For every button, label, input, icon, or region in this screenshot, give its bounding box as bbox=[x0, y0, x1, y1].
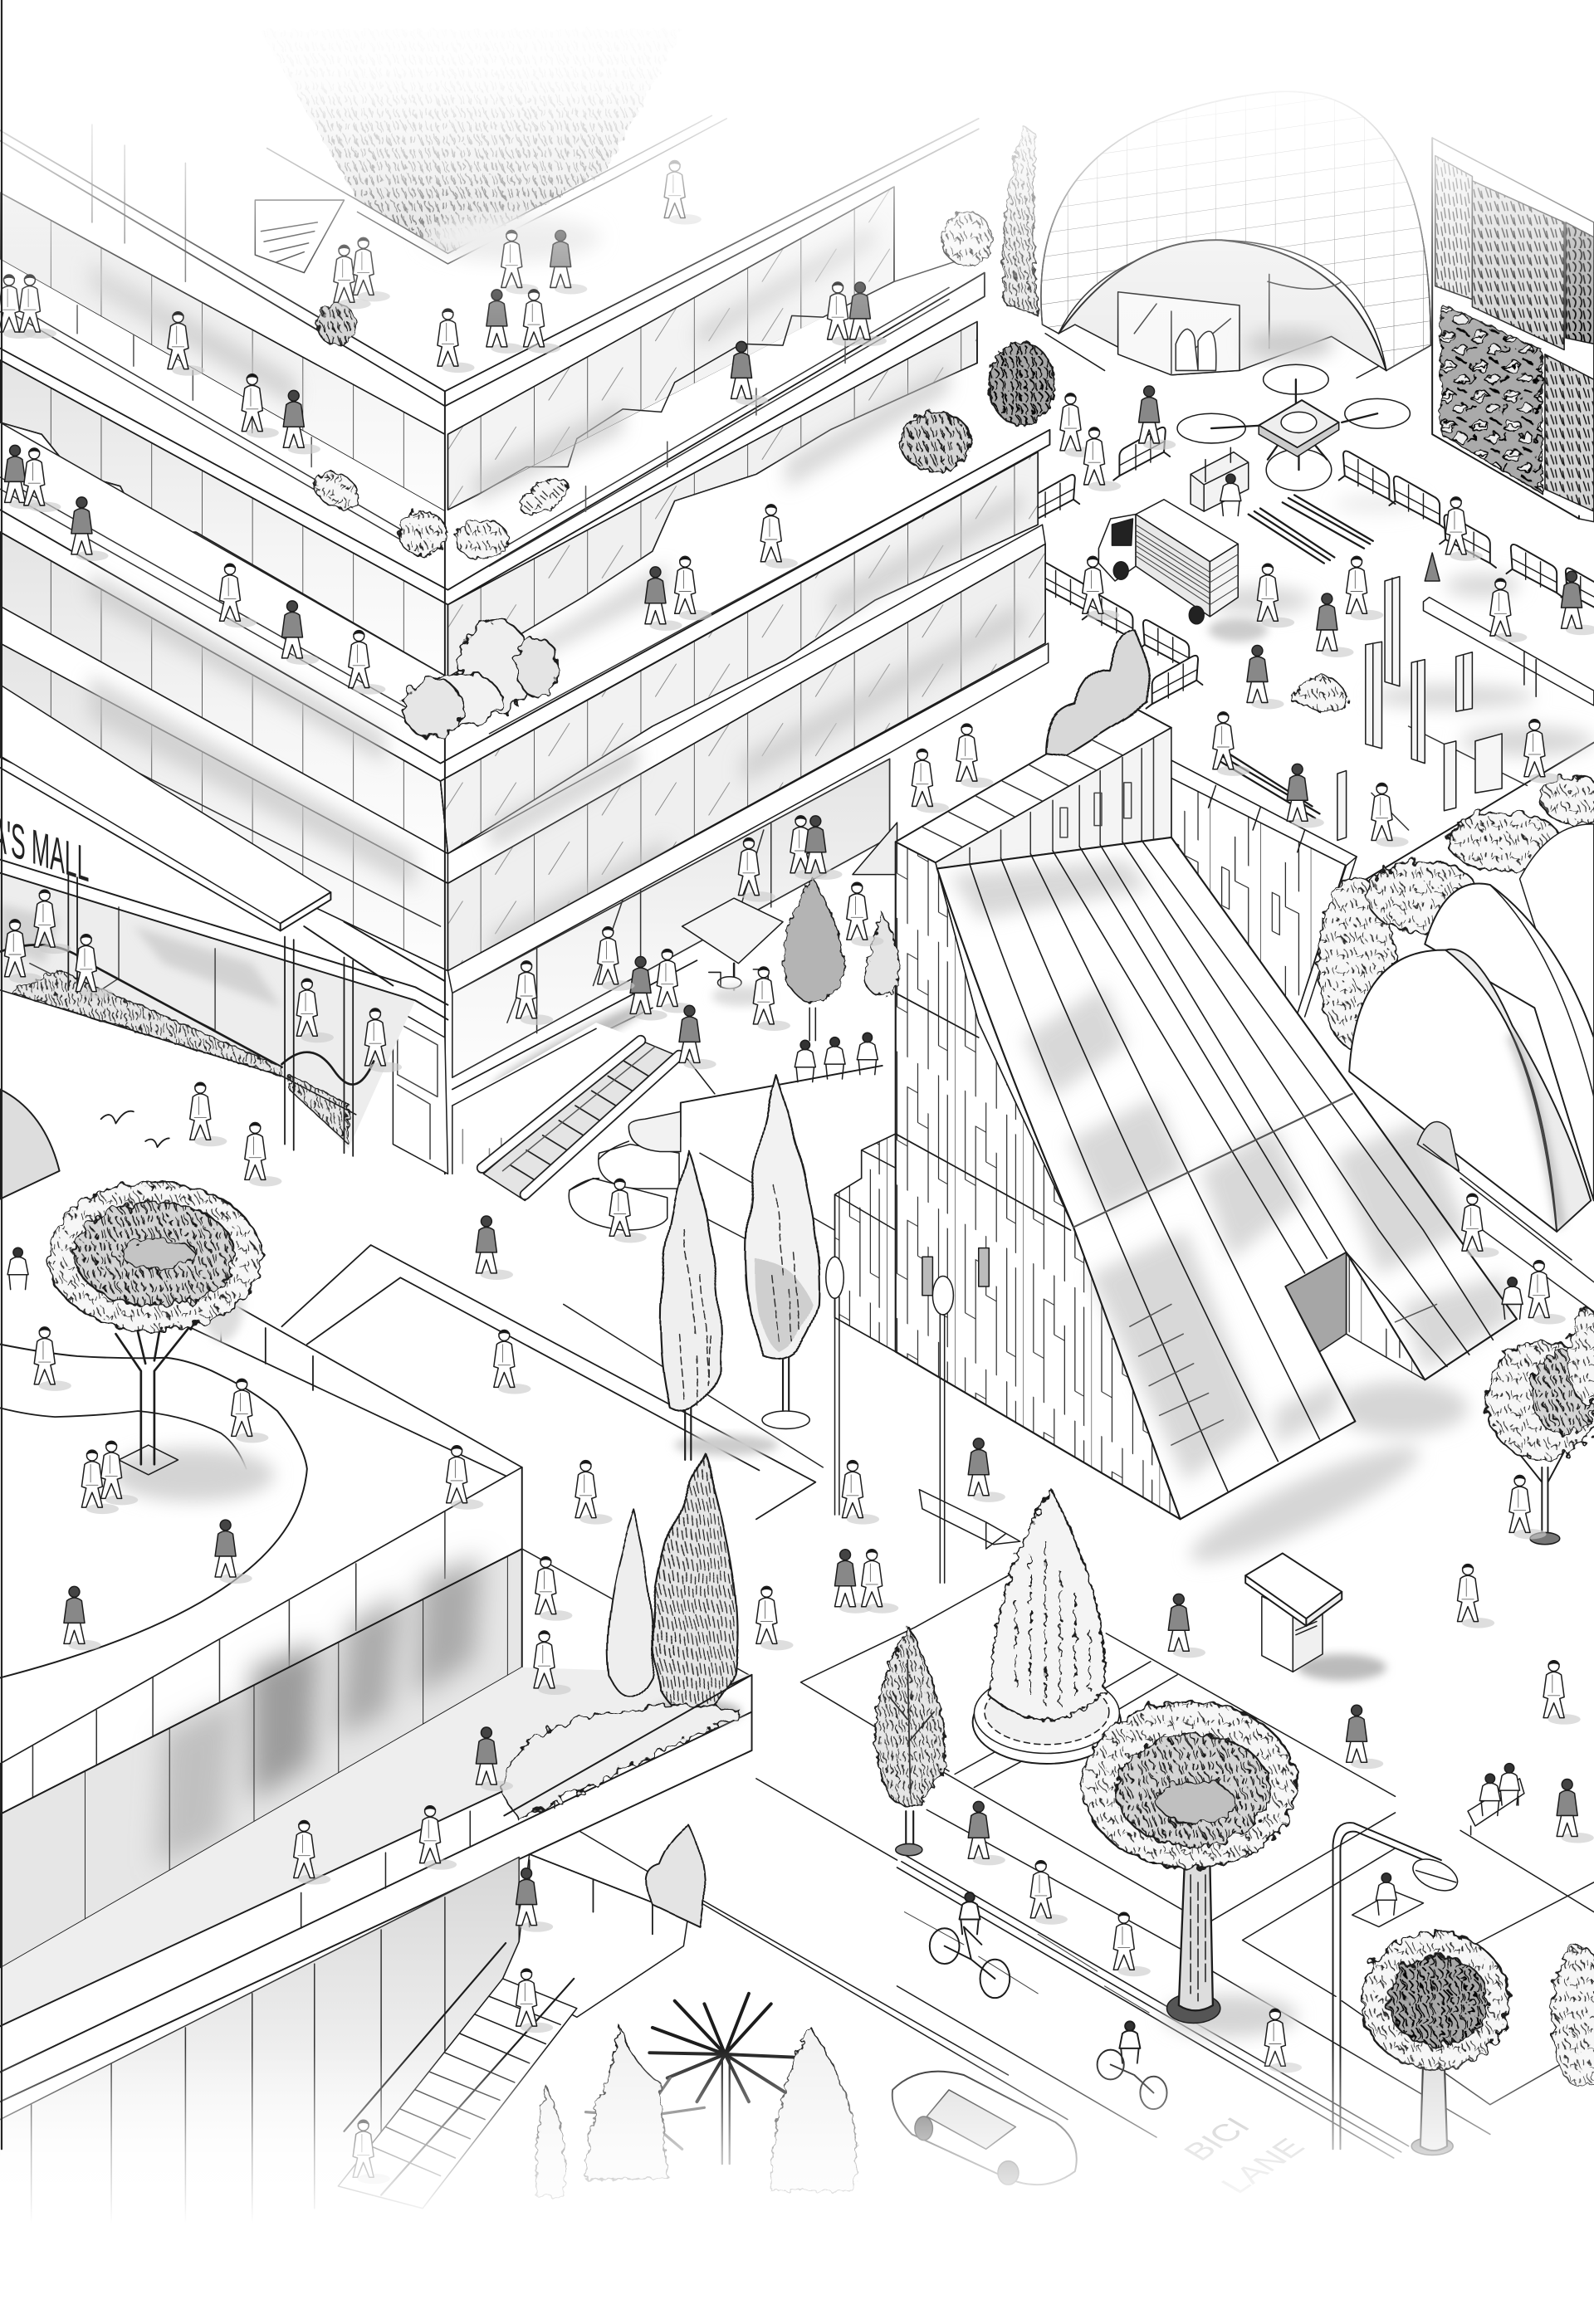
convertible car bbox=[892, 2072, 1077, 2185]
delivery truck bbox=[1098, 500, 1268, 642]
wall under escalator bbox=[452, 1023, 883, 1241]
glass wall bbox=[0, 1549, 522, 1968]
palm and lower plants bbox=[536, 1994, 857, 2196]
edge tree bbox=[1552, 1945, 1594, 2087]
ridge band bbox=[896, 706, 1171, 862]
hedge beside dome bbox=[1003, 126, 1038, 315]
right edge tree bbox=[1485, 1309, 1594, 1545]
hedges behind arches bbox=[1318, 777, 1594, 1049]
long board bbox=[1423, 598, 1594, 706]
glass dome pavilion bbox=[1003, 91, 1430, 378]
escalator bbox=[482, 1041, 679, 1200]
glass 4 bbox=[0, 643, 447, 971]
planter strip bbox=[12, 971, 349, 1145]
stair landing bbox=[503, 1854, 688, 2017]
road speed marks bbox=[904, 1912, 1149, 2013]
left edge rule bbox=[1, 0, 2, 2149]
top fade bbox=[0, 0, 1594, 341]
ramp hedge bbox=[501, 1705, 741, 1820]
fountain bbox=[973, 1490, 1121, 1764]
arches bbox=[1349, 824, 1594, 1311]
lower side block bbox=[835, 1134, 896, 1352]
stairs bbox=[338, 1979, 577, 2209]
glass 3 bbox=[0, 532, 447, 854]
picnic mat bbox=[1352, 1892, 1423, 1926]
left tower face bbox=[896, 842, 1181, 1519]
terrace curved paths bbox=[0, 1345, 307, 1677]
plaza bench bbox=[919, 1490, 1020, 1549]
bottom fade bbox=[0, 2045, 1594, 2324]
left umbrella bbox=[0, 1089, 60, 1199]
roof ribs bbox=[970, 840, 1493, 1491]
drone bbox=[1177, 364, 1410, 491]
terrace edge and planter bbox=[0, 1245, 815, 1783]
bici lane marking bbox=[1176, 2113, 1313, 2199]
lower wall bbox=[0, 1858, 519, 2224]
traffic cone bbox=[1425, 553, 1440, 581]
construction yard bbox=[1023, 364, 1594, 894]
glass 2 bbox=[0, 360, 447, 677]
steel posts bbox=[1337, 577, 1502, 840]
building shrubs bbox=[308, 212, 1150, 756]
streets and plaza lines bbox=[522, 1304, 1594, 2199]
green wall bbox=[1432, 138, 1594, 522]
balcony 2 floor bbox=[0, 364, 1049, 768]
cyclists bbox=[930, 1892, 1167, 2109]
slab 3 bbox=[0, 606, 447, 883]
blurred glass shading bbox=[89, 222, 1023, 964]
notch bbox=[1285, 1252, 1347, 1352]
landing shrub bbox=[647, 1826, 704, 1926]
glass wall rail band bbox=[0, 1467, 522, 1814]
terrace plaza bbox=[0, 1245, 815, 1968]
small plaza tree bbox=[1361, 1933, 1509, 2155]
cafe umbrella and tables bbox=[682, 823, 897, 1006]
birds bbox=[101, 1111, 169, 1147]
balcony 1 floor bbox=[0, 259, 985, 590]
stacked materials bbox=[1215, 495, 1373, 818]
lamp post bbox=[1333, 1823, 1462, 2149]
plaza cypress bbox=[875, 1628, 945, 1856]
bici lane marking: BICI bbox=[1176, 2113, 1258, 2166]
equipment crate bbox=[1191, 447, 1249, 511]
main building bbox=[0, 0, 1049, 1174]
corner pier bbox=[393, 1008, 447, 1174]
A-frame pavilion bbox=[835, 706, 1517, 1579]
bici lane marking: LANE bbox=[1214, 2133, 1313, 2199]
terrace tree bbox=[47, 1183, 261, 1475]
side wing wall bbox=[1171, 760, 1357, 1013]
roof garden bbox=[260, 30, 682, 253]
dome shadow figures bbox=[1176, 329, 1216, 370]
large plaza tree bbox=[1083, 1702, 1298, 2037]
courtyard cypress bbox=[784, 877, 899, 1041]
park bench bbox=[1468, 1779, 1524, 1835]
spiral stairs bbox=[569, 1111, 681, 1230]
roof deck bbox=[37, 0, 979, 398]
kiosk bbox=[1245, 1553, 1386, 1681]
top glass band bbox=[0, 193, 445, 511]
ramp and lower walls bbox=[0, 1667, 752, 2224]
roof stair bbox=[255, 200, 344, 273]
ground shopfront bbox=[447, 643, 1049, 993]
cypress trees upper bbox=[660, 1075, 819, 1460]
barriers bbox=[1023, 427, 1594, 709]
dirt pile bbox=[1290, 676, 1348, 711]
mall front and awning bbox=[0, 685, 447, 1156]
sloped roof bbox=[937, 837, 1517, 1519]
arch doorway bbox=[1417, 1122, 1459, 1171]
awning bbox=[0, 685, 330, 923]
lower cypress pair bbox=[607, 1452, 741, 1724]
street poles bbox=[826, 1257, 953, 1583]
